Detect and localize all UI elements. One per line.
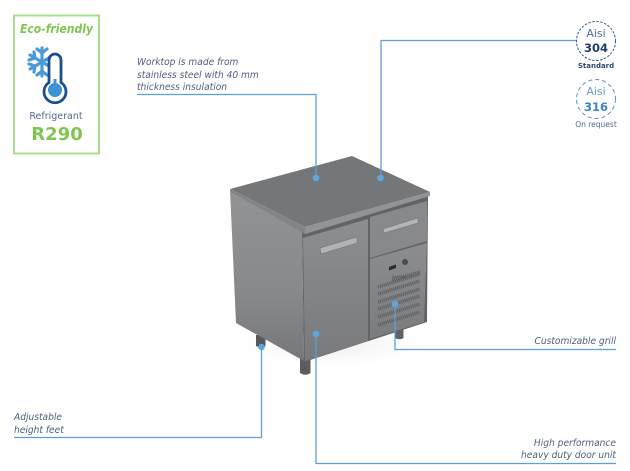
badge: Aisi 304 standard: 304 bbox=[584, 41, 608, 55]
text: worktop callout: stainless steel with 40 mm bbox=[137, 70, 259, 81]
badge: Aisi 304 standard bbox=[576, 22, 616, 70]
badge: Aisi 316 on request: On request bbox=[575, 120, 617, 129]
text: door unit callout bbox=[521, 438, 616, 461]
display bbox=[389, 264, 396, 270]
door bbox=[303, 219, 368, 361]
text: worktop callout: thickness insulation bbox=[137, 82, 227, 93]
text: customizable grill callout: Customizable grill bbox=[535, 336, 616, 347]
text: worktop callout bbox=[137, 57, 259, 93]
badge: Aisi 316 on request bbox=[575, 80, 617, 129]
badge: Aisi 304 standard: Standard bbox=[578, 62, 614, 70]
text: adjustable feet callout: height feet bbox=[14, 425, 64, 436]
badge: Aisi 316 on request: 316 bbox=[584, 100, 608, 114]
product: stainless steel refrigerated counter: DAYTON bbox=[392, 275, 407, 279]
text: worktop callout: Worktop is made from bbox=[137, 57, 239, 68]
text: R290: R290 bbox=[31, 124, 83, 145]
grill panel bbox=[370, 243, 427, 339]
badge: Aisi 316 on request: Aisi bbox=[586, 85, 606, 98]
text: adjustable feet callout bbox=[13, 412, 64, 436]
cabinet front backing bbox=[302, 196, 428, 362]
drawer handle bbox=[383, 218, 418, 233]
door handle bbox=[320, 237, 357, 254]
text: adjustable feet callout: Adjustable bbox=[13, 412, 62, 423]
icon: snowflake and thermometer bbox=[29, 48, 66, 103]
heading: Eco-friendly: Eco-friendly bbox=[20, 21, 94, 36]
drawer bbox=[370, 201, 427, 258]
cabinet side bbox=[230, 190, 304, 361]
text: door unit callout: High performance bbox=[534, 438, 616, 449]
callout dots bbox=[258, 175, 398, 350]
badge: Aisi 304 standard: Aisi bbox=[586, 27, 606, 40]
product: stainless steel refrigerated counter bbox=[215, 156, 445, 375]
panel: eco-friendly refrigerant badge bbox=[14, 16, 99, 154]
feet bbox=[256, 335, 266, 348]
text: Refrigerant: Refrigerant bbox=[29, 111, 83, 122]
vent slots bbox=[378, 272, 420, 325]
text: door unit callout: heavy duty door unit bbox=[521, 450, 616, 461]
worktop bbox=[230, 156, 430, 227]
